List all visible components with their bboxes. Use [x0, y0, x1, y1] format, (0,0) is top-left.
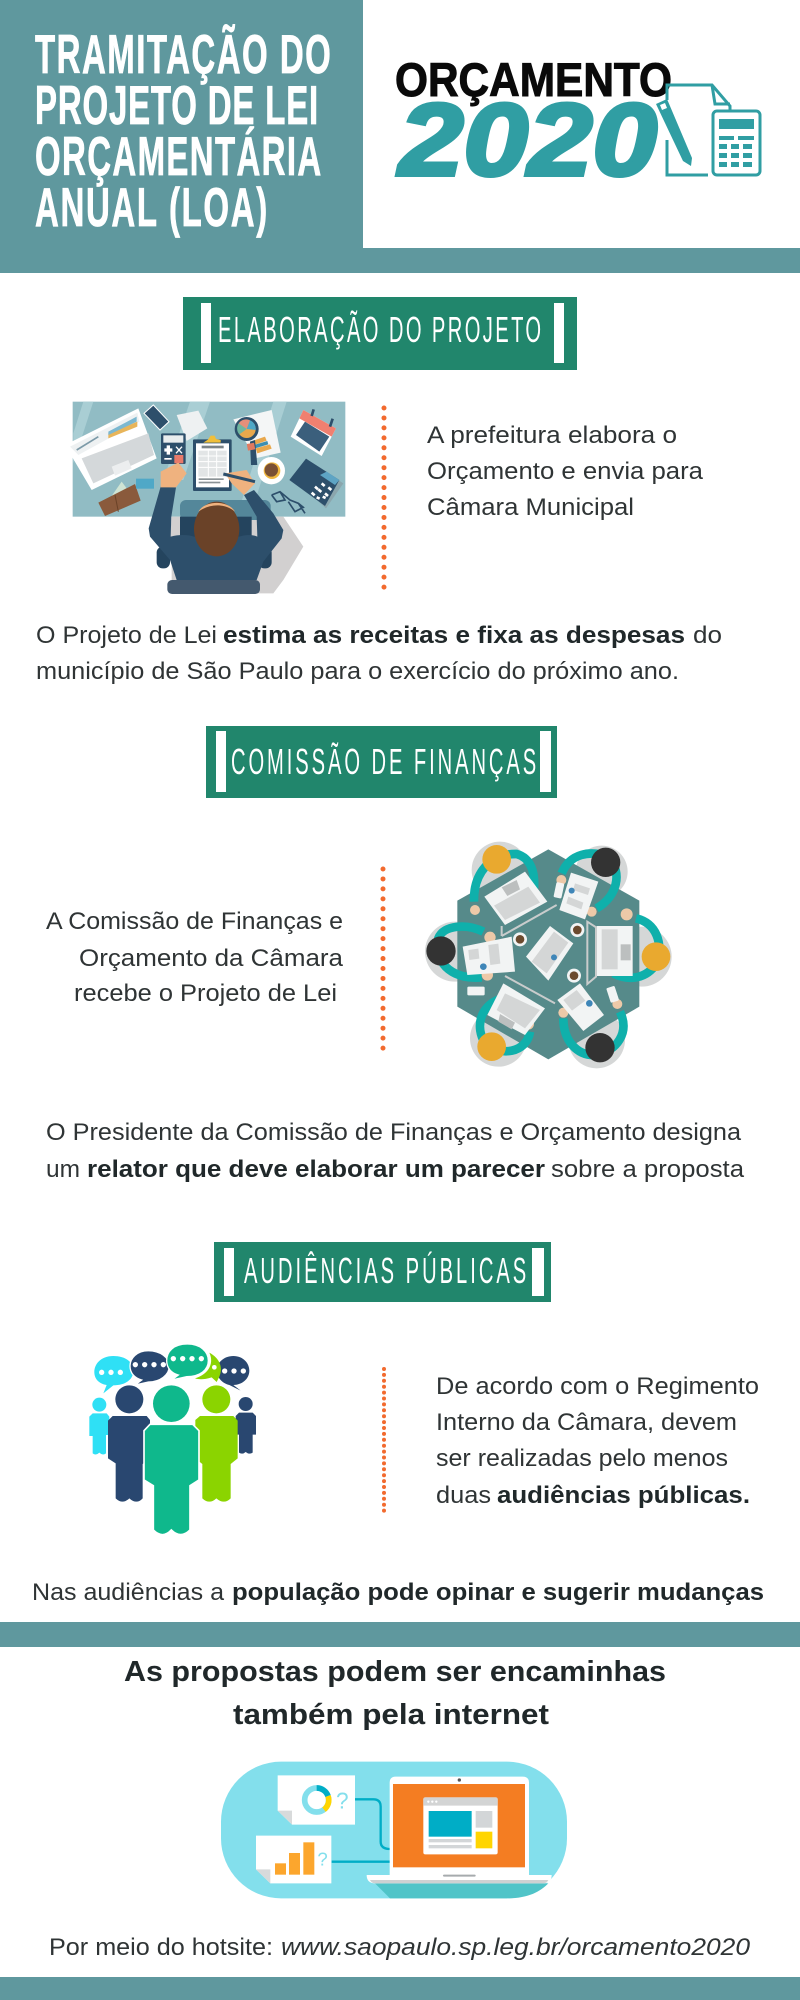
- paragraph: presidente: sobre a proposta: [551, 1156, 745, 1183]
- heading: propostas pela internet: As propostas podem ser encaminhas: [124, 1656, 666, 1688]
- footer text: Por meio do hotsite:: [49, 1934, 273, 1961]
- connectors: [332, 1799, 390, 1862]
- heading: propostas pela internet: [124, 1656, 666, 1731]
- footer band: [0, 1977, 800, 2000]
- icon: calculator: [713, 111, 760, 175]
- coffee cups: [513, 923, 584, 983]
- small person right: [236, 1397, 256, 1454]
- text: comissão: [46, 908, 344, 1007]
- section heading: Elaboração do projeto: [183, 297, 577, 370]
- report: donut: ?: [336, 1787, 349, 1813]
- section heading: Elaboração do projeto: ELABORAÇÃO DO PROJETO: [218, 309, 541, 351]
- dotted divider 2: [380, 869, 386, 1050]
- paragraph: presidente: um: [46, 1156, 80, 1183]
- divider band: [0, 1622, 800, 1647]
- title: ANUAL (LOA): [35, 176, 267, 238]
- logo word ORÇAMENTO: ORÇAMENTO: [395, 53, 672, 106]
- title: TRAMITAÇÃO DO: [35, 23, 331, 85]
- phones: [467, 882, 619, 1003]
- text: regimento: Interno da Câmara, devem: [436, 1409, 737, 1436]
- person: [149, 463, 283, 580]
- report: donut: [278, 1775, 355, 1825]
- background pill: [221, 1762, 567, 1898]
- table: [457, 849, 639, 1059]
- icon: document: [667, 85, 730, 175]
- text: regimento: [436, 1373, 759, 1509]
- laptop: [65, 408, 157, 490]
- text: regimento: ser realizadas pelo menos: [436, 1445, 728, 1472]
- text: prefeitura: Câmara Municipal: [427, 494, 634, 521]
- person shadow: [170, 517, 303, 593]
- illustration: people talking: [89, 1344, 256, 1535]
- telephone: [289, 459, 343, 508]
- section heading: Comissão de finanças: COMISSÃO DE FINANÇAS: [231, 741, 536, 783]
- laptops: [484, 872, 633, 1035]
- person lime: [195, 1385, 238, 1502]
- header band: [0, 0, 800, 273]
- person green: [144, 1385, 199, 1535]
- browser window: [423, 1797, 498, 1854]
- logo number 2020: 2020: [397, 83, 657, 197]
- envelope: [177, 411, 207, 441]
- cuffs and hands: [470, 875, 633, 1030]
- desk: [73, 402, 345, 517]
- text: prefeitura: A prefeitura elabora o: [427, 422, 677, 449]
- chair: [157, 500, 272, 594]
- small person left: [89, 1398, 109, 1455]
- glasses: [272, 492, 305, 513]
- speech bubbles: [94, 1344, 249, 1393]
- footer text: www.saopaulo.sp.leg.br/orcamento2020: [281, 1934, 751, 1961]
- paragraph: presidente: [46, 1119, 745, 1183]
- calculator: [161, 433, 186, 464]
- footer text: [49, 1934, 751, 1961]
- magnifier: [235, 417, 259, 441]
- paragraph: presidente: O Presidente da Comissão de Finanças e Orçamento designa: [46, 1119, 742, 1146]
- arms: [438, 854, 659, 1055]
- paragraph: projeto de lei: município de São Paulo para o exercício do próximo ano.: [36, 658, 679, 685]
- text: prefeitura: [427, 422, 704, 521]
- clipboard: [193, 436, 232, 491]
- heading: propostas pela internet: também pela internet: [233, 1699, 549, 1731]
- icon: pencil: [656, 99, 692, 166]
- illustration: man at desk: [65, 402, 345, 594]
- illustration: laptop and reports: [221, 1762, 567, 1898]
- report: bars: [256, 1836, 331, 1883]
- text: comissão: recebe o Projeto de Lei: [74, 980, 337, 1007]
- laptop shadow: [375, 1883, 548, 1898]
- wallet: [98, 479, 154, 516]
- paragraph: projeto de lei: do: [693, 622, 722, 649]
- person navy: [108, 1385, 150, 1502]
- section heading: Audiências públicas: AUDIÊNCIAS PÚBLICAS: [244, 1251, 526, 1292]
- dotted divider 1: [382, 408, 386, 590]
- text: comissão: Orçamento da Câmara: [79, 945, 344, 972]
- phone: [144, 405, 169, 430]
- documents: [463, 873, 604, 1031]
- text: população pode opinar: [32, 1579, 764, 1606]
- heads: [426, 845, 670, 1062]
- text: regimento: audiências públicas.: [497, 1482, 750, 1509]
- logo: Orçamento 2020: [395, 53, 760, 197]
- calendar: [291, 409, 336, 456]
- paragraph: projeto de lei: estima as receitas e fixa as despesas: [223, 622, 685, 649]
- title: [35, 23, 331, 238]
- bubble dots: [99, 1356, 246, 1375]
- paragraph: projeto de lei: [36, 622, 722, 685]
- text: regimento: duas: [436, 1482, 491, 1509]
- text: comissão: A Comissão de Finanças e: [46, 908, 343, 935]
- paragraph: projeto de lei: O Projeto de Lei: [36, 622, 217, 649]
- report: bars: ?: [317, 1848, 328, 1869]
- coffee cup: [258, 457, 285, 484]
- title: ORÇAMENTÁRIA: [35, 125, 321, 187]
- chair shadows: [425, 842, 672, 1068]
- text: população pode opinar: Nas audiências a: [32, 1579, 225, 1606]
- chart papers: [233, 410, 281, 465]
- title: PROJETO DE LEI: [35, 74, 318, 136]
- section heading: Audiências públicas: [214, 1242, 551, 1302]
- illustration: meeting table: [425, 842, 672, 1068]
- text: regimento: De acordo com o Regimento: [436, 1373, 759, 1400]
- text: prefeitura: Orçamento e envia para: [427, 458, 704, 485]
- dotted divider 3: [382, 1369, 386, 1516]
- section heading: Comissão de finanças: [206, 726, 557, 798]
- text: população pode opinar: população pode opinar e sugerir mudanças: [232, 1579, 764, 1606]
- paragraph: presidente: relator que deve elaborar um parecer: [87, 1156, 545, 1183]
- laptop: [367, 1777, 552, 1883]
